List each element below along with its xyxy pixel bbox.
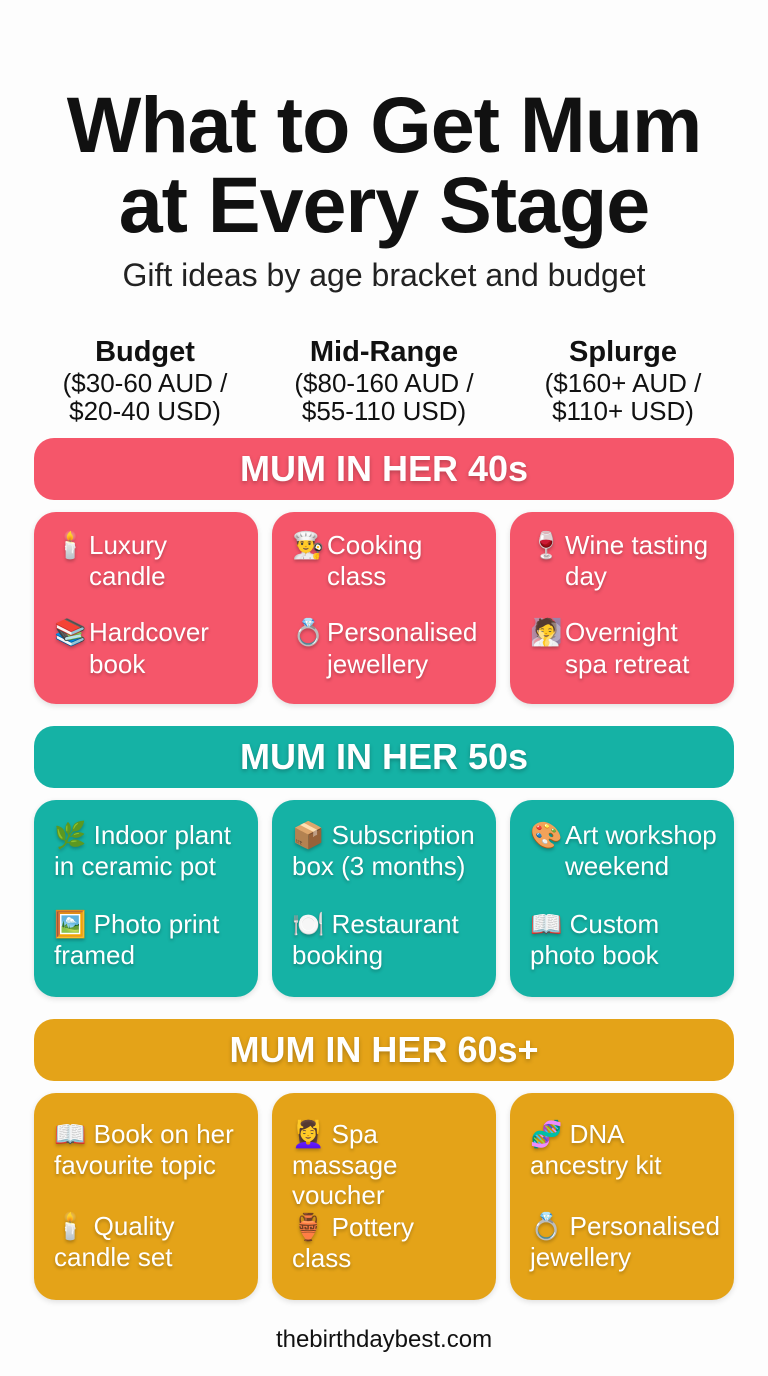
column header: splurge: $110+ USD) bbox=[552, 396, 694, 426]
card: 60s splurge: 💍 Personalised bbox=[530, 1211, 720, 1241]
card: 50s splurge bbox=[510, 800, 734, 997]
card: 50s budget: in ceramic pot bbox=[54, 851, 216, 881]
footer: thebirthdaybest.com bbox=[276, 1326, 492, 1353]
card: 50s mid: 📦 Subscription bbox=[292, 820, 475, 850]
title bbox=[66, 80, 701, 249]
card: 40s splurge: 🍷 bbox=[530, 530, 562, 560]
card: 60s mid: class bbox=[292, 1243, 351, 1273]
card: 40s budget: Hardcover bbox=[89, 617, 209, 647]
card: 40s budget: 🕯️ bbox=[54, 530, 86, 560]
card: 50s budget: 🌿 Indoor plant bbox=[54, 820, 231, 850]
card: 40s mid bbox=[272, 512, 496, 704]
card: 40s splurge: Wine tasting bbox=[565, 530, 708, 560]
card: 50s mid: 🍽️ Restaurant bbox=[292, 909, 459, 939]
band: 50s bbox=[34, 726, 734, 788]
card: 40s splurge bbox=[510, 512, 734, 704]
column header: mid-range bbox=[294, 336, 474, 426]
card: 40s mid: Cooking bbox=[327, 530, 422, 560]
card: 60s mid: massage bbox=[292, 1150, 398, 1180]
title: at Every Stage bbox=[119, 160, 649, 249]
card: 40s budget bbox=[34, 512, 258, 704]
column header: splurge bbox=[545, 336, 702, 426]
card: 40s budget: Luxury bbox=[89, 530, 167, 560]
card: 40s mid: 👨‍🍳 bbox=[292, 530, 324, 560]
card: 60s mid: 💆‍♀️ Spa bbox=[292, 1119, 378, 1149]
card: 50s splurge: Art workshop bbox=[565, 820, 717, 850]
title: What to Get Mum bbox=[67, 80, 701, 169]
card: 60s budget: 📖 Book on her bbox=[54, 1119, 234, 1149]
card: 50s budget: framed bbox=[54, 940, 135, 970]
column header: budget: Budget bbox=[95, 336, 195, 368]
column header: budget: $20-40 USD) bbox=[69, 396, 221, 426]
card: 60s splurge: jewellery bbox=[530, 1242, 631, 1272]
column header: mid-range: ($80-160 AUD / bbox=[294, 368, 474, 398]
card: 60s budget: favourite topic bbox=[54, 1150, 216, 1180]
card: 60s budget: candle set bbox=[54, 1242, 173, 1272]
card: 50s mid bbox=[272, 800, 496, 997]
card: 40s mid: jewellery bbox=[327, 649, 428, 679]
card: 60s mid: 🏺 Pottery bbox=[292, 1212, 414, 1242]
card: 60s splurge: 🧬 DNA bbox=[530, 1119, 624, 1149]
card: 40s splurge: Overnight bbox=[565, 617, 678, 647]
column header: splurge: Splurge bbox=[569, 336, 677, 368]
card: 40s mid: class bbox=[327, 561, 386, 591]
band: 60s: MUM IN HER 60s+ bbox=[229, 1029, 539, 1070]
card: 40s mid: Personalised bbox=[327, 617, 477, 647]
band: 40s: MUM IN HER 40s bbox=[240, 448, 528, 489]
card: 60s mid bbox=[272, 1093, 496, 1300]
card: 40s splurge: 🧖 bbox=[530, 617, 562, 647]
card: 50s mid: box (3 months) bbox=[292, 851, 465, 881]
card: 40s budget: book bbox=[89, 649, 145, 679]
card: 50s splurge: weekend bbox=[565, 851, 669, 881]
card: 50s splurge: 🎨 bbox=[530, 820, 562, 850]
card: 50s splurge: photo book bbox=[530, 940, 659, 970]
card: 60s splurge bbox=[510, 1093, 734, 1300]
card: 40s budget: candle bbox=[89, 561, 166, 591]
card: 50s splurge: 📖 Custom bbox=[530, 909, 659, 939]
column header: mid-range: Mid-Range bbox=[310, 336, 458, 368]
column header: splurge: ($160+ AUD / bbox=[545, 368, 701, 398]
card: 40s mid: 💍 bbox=[292, 617, 324, 647]
card: 40s budget: 📚 bbox=[54, 617, 86, 647]
card: 50s budget bbox=[34, 800, 258, 997]
card: 60s splurge: ancestry kit bbox=[530, 1150, 662, 1180]
card: 40s splurge: spa retreat bbox=[565, 649, 689, 679]
column header: mid-range: $55-110 USD) bbox=[302, 396, 466, 426]
band: 60s bbox=[34, 1019, 734, 1081]
band: 40s bbox=[34, 438, 734, 500]
card: 50s budget: 🖼️ Photo print bbox=[54, 909, 219, 939]
card: 60s budget bbox=[34, 1093, 258, 1300]
column header: budget: ($30-60 AUD / bbox=[63, 368, 227, 398]
column header: budget bbox=[63, 336, 228, 426]
card: 50s mid: booking bbox=[292, 940, 383, 970]
band: 50s: MUM IN HER 50s bbox=[240, 736, 528, 777]
card: 60s mid: voucher bbox=[292, 1180, 384, 1210]
card: 60s budget: 🕯️ Quality bbox=[54, 1211, 175, 1241]
subtitle: Gift ideas by age bracket and budget bbox=[122, 257, 646, 293]
card: 40s splurge: day bbox=[565, 561, 607, 591]
